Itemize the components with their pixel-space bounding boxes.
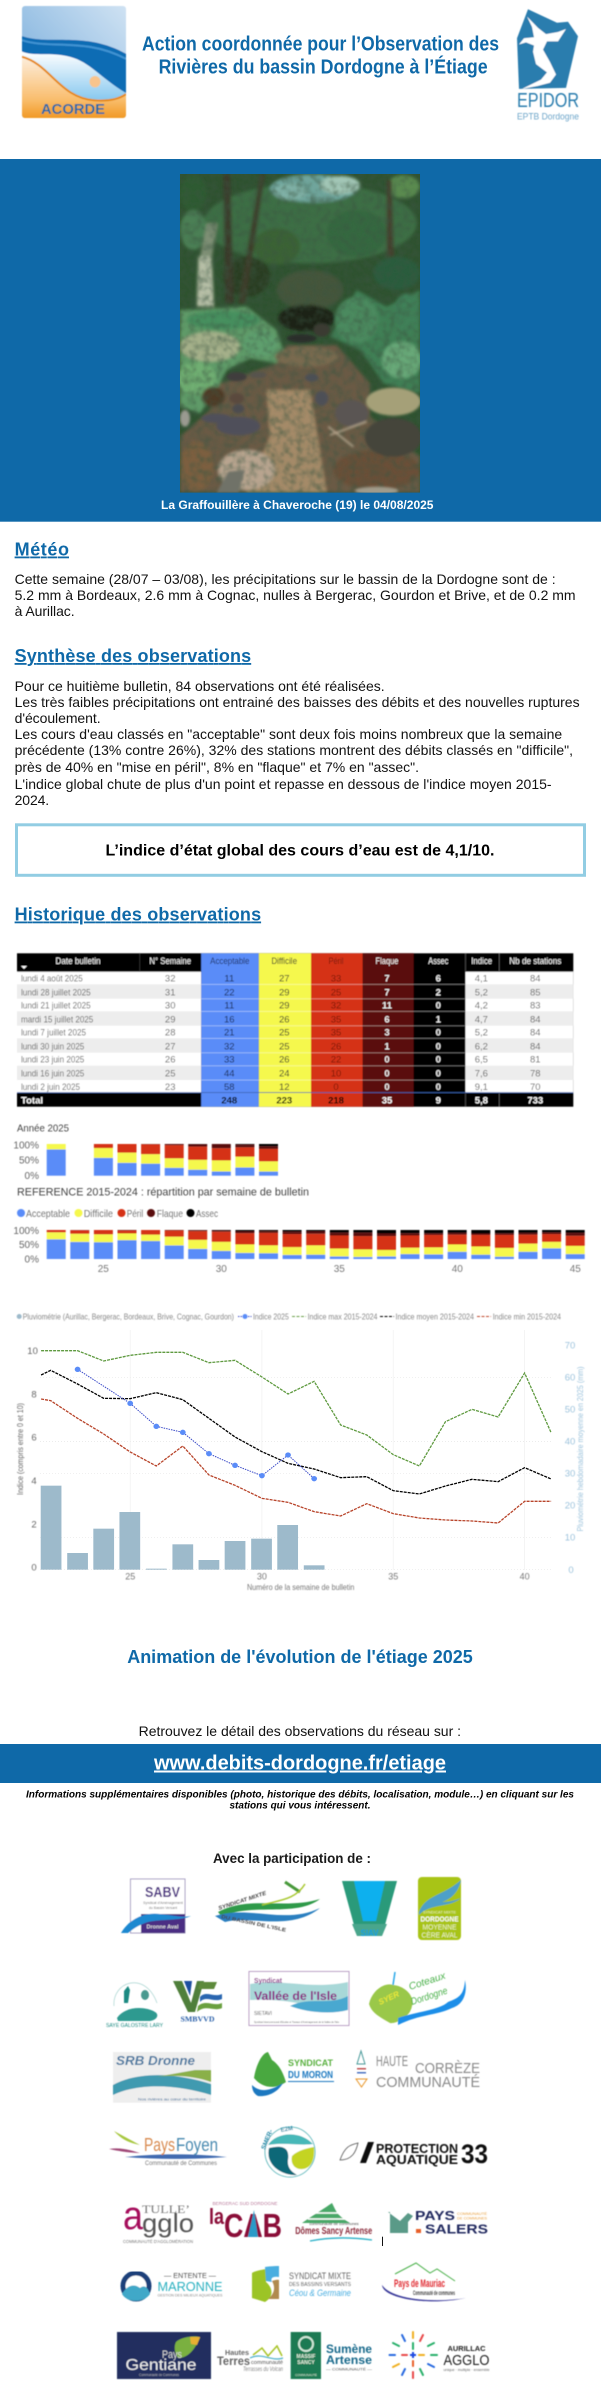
table: historique: 0	[436, 1082, 441, 1093]
legend: classes	[17, 1208, 218, 1220]
logo: SRB Dronne: Nos rivières au cœur du territoire	[138, 2096, 207, 2102]
heading: Historique des observations: Historique des observations	[15, 904, 261, 924]
table: historique: 0	[384, 1055, 390, 1066]
logo: Dordogne moyenne Cère aval: CÈRE AVAL	[422, 1930, 458, 1940]
logo: Pays Gentiane: Gentiane	[126, 2357, 197, 2374]
logo: Entente Maronne: — ENTENTE —	[164, 2273, 216, 2280]
logo: EPIDOR: EPTB Dordogne	[517, 112, 579, 122]
table: historique: mardi 15 juillet 2025	[21, 1014, 93, 1025]
legend: classes: Péril	[127, 1208, 143, 1220]
table: historique: 83	[530, 1000, 541, 1011]
table: historique: lundi 30 juin 2025	[21, 1041, 84, 1052]
table: historique: 44	[224, 1069, 235, 1080]
chart: stacked bars 2025: 100%	[13, 1140, 39, 1152]
logo: Hautes Terres: communauté	[251, 2360, 283, 2366]
logo: Massif du Sancy / Sumène Artense: COMMUNAUTÉ	[295, 2372, 317, 2377]
legend: line chart: Indice min 2015-2024	[493, 1312, 561, 1322]
table: historique: 11	[382, 1000, 393, 1011]
logo: La CAB: BERGERAC SUD DORDOGNE	[212, 2201, 278, 2206]
table: historique: 32	[224, 1041, 235, 1052]
text block: météo: 5.2 mm à Bordeaux, 2.6 mm à Cognac, nulles à Bergerac, Gourdon et Brive, et de 0.2 mm	[15, 587, 576, 603]
logo: SABV: Dronne Aval	[146, 1924, 179, 1930]
table: historique: 21	[224, 1028, 235, 1039]
table: historique: 9,1	[475, 1082, 488, 1093]
logo: Coteaux de Dordogne: Dordogne	[410, 1986, 449, 2008]
logo: Tulle agglo: TULLE’	[142, 2202, 190, 2216]
table: historique: 26	[279, 1055, 290, 1066]
logo: Vallée de l'Isle: Syndicat	[254, 1976, 282, 1985]
logo: SRB Dronne	[113, 2052, 211, 2103]
table: historique: 248	[221, 1096, 237, 1107]
rainfall bars	[41, 1486, 325, 1570]
table: historique: 5,2	[475, 1028, 488, 1039]
table: historique: lundi 4 août 2025	[21, 973, 83, 984]
table: historique: Total	[21, 1096, 43, 1107]
right axis: 10	[565, 1532, 575, 1544]
logo: Coteaux de Dordogne: SYER	[377, 1989, 401, 2007]
table: historique: 0	[436, 1069, 441, 1080]
table: historique: 1	[384, 1041, 390, 1052]
logo: SMER-E2M: E2M	[280, 2126, 294, 2134]
logo: Dordogne moyenne Cère aval	[418, 1877, 461, 1940]
logo: Massif du Sancy / Sumène Artense	[291, 2332, 372, 2379]
table: historique: 7	[384, 987, 390, 998]
logo: Haute-Corrèze Communauté: CORRÈZE	[415, 2060, 480, 2077]
text block: synthèse: 2024.	[15, 792, 49, 808]
table: historique: 81	[530, 1055, 541, 1066]
logo: Pays de Salers: SALERS	[425, 2222, 488, 2236]
table: historique: 23	[165, 1082, 175, 1093]
table: historique	[17, 953, 573, 1107]
logo: Syndicat du Moron: SYNDICAT	[288, 2058, 333, 2069]
logo: SABV: Syndicat d'Aménagement	[143, 1901, 183, 1905]
logo: Massif du Sancy / Sumène Artense: — COMMUNAUTÉ —	[326, 2366, 372, 2372]
chart: stacked bars reference 2015-2024	[13, 1226, 585, 1275]
logo: Céou et Germaine: DES BASSINS VERSANTS	[289, 2282, 351, 2288]
table: historique: 35	[331, 1014, 341, 1025]
table: historique: 31	[165, 987, 175, 998]
logo: SMBVVD: SMBVVD	[180, 2014, 215, 2024]
logo: Coteaux de Dordogne	[369, 1970, 466, 2025]
table: historique: 16	[224, 1014, 235, 1025]
table: historique: 218	[328, 1096, 344, 1107]
legend: line chart	[17, 1312, 561, 1322]
legend: classes: Acceptable	[26, 1208, 70, 1220]
table: historique: Indice	[471, 956, 492, 967]
logo: Protection aquatique 33	[340, 2139, 488, 2169]
chart: stacked bars reference 2015-2024: 25	[98, 1264, 109, 1275]
x axis: 35	[388, 1572, 398, 1582]
table: historique: 5,8	[475, 1096, 488, 1107]
left axis: Indice (compris entre 0 et 10)	[15, 1403, 25, 1495]
text block: météo: à Aurillac.	[15, 603, 75, 619]
right axis: 60	[565, 1372, 575, 1384]
table: historique: 22	[331, 1055, 341, 1066]
logo: La CAB: CAB	[224, 2207, 282, 2244]
text block: météo	[15, 571, 576, 619]
table: historique: lundi 16 juin 2025	[21, 1069, 84, 1080]
logo: Syndicat du Moron	[252, 2052, 334, 2096]
logo: ACORDE	[22, 6, 126, 118]
heading: participation: Avec la participation de :	[213, 1850, 371, 1866]
logo: Pays de Mauriac	[382, 2263, 466, 2301]
right axis: 20	[565, 1500, 575, 1512]
table: historique: 27	[165, 1041, 175, 1052]
table: historique: 25	[279, 1028, 290, 1039]
table: historique: Difficile	[271, 956, 297, 967]
table: historique: 6,2	[475, 1041, 488, 1052]
table: historique: lundi 21 juillet 2025	[21, 1000, 91, 1011]
right axis: 50	[565, 1404, 575, 1416]
logo: Massif du Sancy / Sumène Artense: SANCY	[297, 2360, 315, 2366]
text: informations supplémentaires: stations qui vous intéressent.	[230, 1800, 371, 1812]
table: historique: 29	[279, 1000, 290, 1011]
table: historique: 30	[165, 1000, 175, 1011]
title: Rivières du bassin Dordogne à l’Étiage	[159, 56, 488, 78]
link band: www.debits-dordogne.fr/etiage	[153, 1752, 446, 1774]
table: historique: 7,6	[475, 1069, 488, 1080]
chart: stacked bars reference 2015-2024: 35	[334, 1264, 345, 1275]
logo: Tulle agglo: COMMUNAUTÉ D'AGGLOMÉRATION	[123, 2238, 193, 2244]
table: historique: 84	[530, 1041, 541, 1052]
table: historique: 0	[436, 1000, 441, 1011]
table: historique: 84	[530, 1028, 541, 1039]
table: historique: 32	[165, 973, 175, 984]
photo: La Graffouillère	[177, 174, 422, 495]
table: historique: N° Semaine	[149, 956, 191, 967]
logo: SABV: du Bassin Versant	[149, 1906, 177, 1910]
callout: indice global: L’indice d’état global des cours d’eau est de 4,1/10.	[106, 842, 494, 860]
logo: SABV	[121, 1879, 191, 1933]
table: historique: lundi 2 juin 2025	[21, 1082, 80, 1093]
logo: Dordogne moyenne Cère aval: MOYENNE	[422, 1924, 457, 1932]
logo: EPIDOR: EPIDOR	[517, 90, 579, 112]
left axis: 2	[31, 1520, 37, 1530]
logo: Vallée de l'Isle	[249, 1972, 349, 2026]
table: historique: 84	[530, 973, 541, 984]
text block: synthèse: près de 40% en "mise en péril", 8% en "flaque" et 7% en "assec".	[15, 759, 419, 775]
logo: Dordogne moyenne Cère aval: SYNDICAT MIXTE	[423, 1910, 457, 1914]
table: historique: Acceptable	[210, 956, 249, 967]
logo: Vallée de l'Isle: Syndicat Intercommunal d'Etudes et Travaux d'Aménagement de la Vallée de l'Isle	[254, 2020, 339, 2024]
logo: Haute-Corrèze Communauté	[356, 2051, 480, 2091]
logo: La CAB: la	[209, 2204, 225, 2229]
table: historique: 9	[436, 1096, 441, 1107]
table: historique: 0	[384, 1069, 390, 1080]
logo: Saye Galostre Lary	[106, 1983, 163, 2029]
logo: Coteaux de Dordogne: Coteaux	[408, 1970, 448, 1993]
table: historique: Péril	[328, 956, 344, 967]
title: Action coordonnée pour l’Observation des	[142, 34, 499, 56]
table: historique: 223	[276, 1096, 292, 1107]
table: historique: 1	[436, 1014, 442, 1025]
logo: SMER-E2M: SMER-	[260, 2129, 275, 2151]
logo: Hautes Terres: Terres	[217, 2354, 250, 2368]
left axis: 0	[31, 1562, 37, 1574]
logo: Dômes Sancy Artense	[295, 2203, 373, 2241]
table: historique: 35	[382, 1096, 393, 1107]
logo: Aurillac Agglo: AURILLAC	[448, 2344, 486, 2353]
logo: Hautes Terres	[217, 2346, 283, 2373]
chart: stacked bars 2025	[13, 1140, 278, 1182]
table: historique: 0	[384, 1082, 390, 1093]
table: historique: 0	[436, 1041, 441, 1052]
logo: Pays de Salers: DE COMMUNES	[457, 2216, 488, 2220]
table: historique: 4,2	[475, 1000, 488, 1011]
table: historique: 26	[331, 1041, 341, 1052]
heading: REFERENCE 2015-2024: REFERENCE 2015-2024 : répartition par semaine de bulletin	[17, 1186, 309, 1198]
chart: stacked bars reference 2015-2024: 40	[452, 1264, 463, 1275]
table: historique: Nb de stations	[509, 956, 562, 967]
lines: index series	[41, 1351, 551, 1523]
table: historique: 24	[279, 1069, 290, 1080]
right axis: 70	[565, 1340, 575, 1352]
logo: Pays de Salers: PAYS	[415, 2208, 455, 2223]
heading: Synthèse des observations: Synthèse des observations	[15, 646, 251, 666]
legend: line chart: Indice moyen 2015-2024	[396, 1312, 474, 1322]
text: informations supplémentaires	[26, 1788, 574, 1812]
table: historique: 33	[331, 973, 341, 984]
table: historique: 70	[530, 1082, 541, 1093]
chart: stacked bars 2025: 0%	[25, 1171, 39, 1182]
text: retrouvez: Retrouvez le détail des observations du réseau sur :	[139, 1723, 461, 1739]
logo: Massif du Sancy / Sumène Artense: MASSIF	[297, 2354, 315, 2360]
table: historique: 84	[530, 1014, 541, 1025]
logo: Céou et Germaine: SYNDICAT MIXTE	[289, 2271, 351, 2281]
logo: Pays Gentiane	[117, 2332, 211, 2379]
logo: SABV: SABV	[145, 1884, 180, 1901]
left axis: 8	[31, 1390, 37, 1400]
table: historique: 0	[436, 1028, 441, 1039]
heading: animation: Animation de l'évolution de l'étiage 2025	[127, 1647, 473, 1667]
table: historique: 12	[279, 1082, 290, 1093]
table: historique: 25	[331, 987, 341, 998]
table: historique: Date bulletin	[56, 956, 100, 967]
x axis: 30	[257, 1572, 267, 1582]
table: historique: 10	[331, 1069, 341, 1080]
logo: Syndicat du Moron: DU MORON	[288, 2070, 333, 2081]
table: historique: lundi 7 juillet 2025	[21, 1028, 86, 1039]
logo: Dômes Sancy Artense: communauté de communes	[309, 2221, 359, 2226]
logo: Vallée de l'Isle: SIETAVI	[254, 2011, 272, 2017]
right axis: 30	[565, 1468, 575, 1480]
logo: SMER-E2M	[260, 2126, 315, 2177]
logo: Pays Foyen: Pays	[144, 2135, 175, 2155]
table: historique: 25	[165, 1069, 175, 1080]
left axis: 4	[31, 1476, 37, 1487]
chart: stacked bars reference 2015-2024: 45	[570, 1264, 581, 1275]
table: historique: 29	[279, 987, 290, 998]
text block: synthèse: d'écoulement.	[15, 710, 101, 726]
text block: synthèse: L'indice global chute de plus d'un point et repasse en dessous de l'indice moyen 2015-	[15, 776, 552, 792]
logo: Pays de Mauriac: Pays de Mauriac	[394, 2278, 445, 2290]
logo: Entente Maronne	[122, 2273, 223, 2301]
logo: Syndicat du bassin de l'Isle: DU BASSIN DE L'ISLE	[221, 1914, 287, 1934]
table: historique: 58	[224, 1082, 235, 1093]
table: historique: 0	[333, 1082, 339, 1093]
logo: EPIDOR	[517, 9, 579, 122]
logo: ACORDE: ACORDE	[41, 102, 105, 118]
right axis	[565, 1340, 585, 1576]
logo: Protection aquatique 33: 33	[461, 2139, 488, 2169]
logo: Dordogne moyenne Cère aval: DORDOGNE	[420, 1916, 459, 1924]
logo: SIAV	[342, 1881, 397, 1939]
text block: météo: Cette semaine (28/07 – 03/08), les précipitations sur le bassin de la Dordogne sont de :	[15, 571, 556, 587]
text block: synthèse: Pour ce huitième bulletin, 84 observations ont été réalisées.	[15, 678, 385, 694]
logo: Entente Maronne: MARONNE	[158, 2279, 223, 2294]
logo: Tulle agglo: gglo	[142, 2208, 194, 2238]
heading: Météo: Météo	[15, 540, 69, 560]
logo: Tulle agglo: a	[123, 2194, 144, 2238]
table: historique: 25	[279, 1041, 290, 1052]
table: historique: 11	[224, 973, 234, 984]
table: historique: 11	[224, 1000, 234, 1011]
logo: Pays Gentiane: Communauté de Communes	[139, 2372, 179, 2377]
logo: SRB Dronne: SRB Dronne	[116, 2053, 195, 2068]
table: historique: 4,7	[475, 1014, 488, 1025]
table: historique: 6,5	[475, 1055, 488, 1066]
text: informations supplémentaires: Informations supplémentaires disponibles (photo, historique des débits, localisation, module…) en cliquant sur les	[26, 1788, 574, 1800]
table: historique: 28	[165, 1028, 175, 1039]
title	[142, 34, 499, 78]
chart: stacked bars reference 2015-2024: 0%	[25, 1254, 39, 1266]
logo: Pays Foyen: Foyen	[176, 2135, 218, 2155]
x axis: 40	[520, 1572, 530, 1582]
logo: SMBVVD	[173, 1981, 222, 2024]
logo: Entente Maronne: GESTION DES MILIEUX AQUATIQUES	[158, 2294, 223, 2298]
legend: line chart: Indice 2025	[253, 1312, 289, 1322]
table: historique: 0	[436, 1055, 441, 1066]
logo: Pays de Salers: COMMUNAUTÉ	[457, 2211, 488, 2216]
left axis: 6	[31, 1432, 37, 1444]
logo: Saye Galostre Lary: SAYE GALOSTRE LARY	[106, 2023, 163, 2029]
text caret	[382, 2237, 383, 2246]
logo: Massif du Sancy / Sumène Artense: Artense	[326, 2355, 372, 2367]
logo: Syndicat du bassin de l'Isle: SYNDICAT MIXTE	[218, 1891, 268, 1912]
right axis: Pluviométrie hebdomadaire moyenne en 2025 (mm)	[575, 1366, 585, 1532]
table: historique: 2	[436, 987, 441, 998]
logo: SIAV: SIAV	[360, 1928, 379, 1939]
text block: synthèse: précédente (13% contre 26%), 32% des stations montrent des débits classés en "difficile",	[15, 742, 573, 758]
left axis: 10	[27, 1346, 38, 1357]
table: historique: 3	[384, 1028, 390, 1039]
chart: stacked bars reference 2015-2024: 50%	[19, 1240, 39, 1251]
logo: Aurillac Agglo: AGGLO	[444, 2352, 490, 2369]
logo: Céou et Germaine	[252, 2266, 351, 2302]
logo: Haute-Corrèze Communauté: HAUTE	[376, 2053, 408, 2070]
table: historique: lundi 28 juillet 2025	[21, 987, 91, 998]
chart: stacked bars reference 2015-2024: 30	[216, 1264, 227, 1275]
chart: stacked bars reference 2015-2024: 100%	[13, 1226, 39, 1237]
logo: Aurillac Agglo: unique · multiple · ensemble	[444, 2368, 490, 2372]
text block: synthèse	[15, 678, 580, 808]
chart: indice and rainfall	[15, 1330, 585, 1592]
logo: Protection aquatique 33: PROTECTION	[376, 2142, 458, 2156]
legend: classes: Assec	[196, 1208, 218, 1220]
legend: line chart: Pluviométrie (Aurillac, Bergerac, Bordeaux, Brive, Cognac, Gourdon)	[23, 1312, 234, 1322]
logo: Dômes Sancy Artense: Dômes Sancy Artense	[295, 2226, 373, 2237]
logo: Pays Foyen	[109, 2131, 227, 2167]
right axis: 40	[565, 1436, 575, 1448]
link band	[0, 1744, 601, 1783]
logo: La CAB	[209, 2201, 282, 2244]
logo: Vallée de l'Isle: Vallée de l'Isle	[254, 1989, 337, 2003]
logo: Massif du Sancy / Sumène Artense: Sumène	[326, 2344, 372, 2356]
logo: Pays de Salers	[388, 2208, 488, 2236]
logo: Tulle agglo	[123, 2194, 194, 2244]
table: historique: 27	[279, 973, 290, 984]
right axis: 0	[568, 1565, 574, 1576]
table: historique: 26	[279, 1014, 290, 1025]
x axis: 25	[125, 1572, 135, 1582]
table: historique: 733	[527, 1096, 543, 1107]
table: historique: 6	[384, 1014, 390, 1025]
logo: Pays de Mauriac: Communauté de communes	[413, 2291, 455, 2297]
photo caption: La Graffouillère à Chaveroche (19) le 04/08/2025	[161, 498, 434, 512]
legend: classes: Flaque	[157, 1208, 183, 1220]
table: historique: Flaque	[376, 956, 398, 967]
x axis: Numéro de la semaine de bulletin	[247, 1582, 355, 1592]
table: historique: 35	[331, 1028, 341, 1039]
logo: Pays Gentiane: Pays	[162, 2349, 182, 2361]
logo: Pays Foyen: Communauté de Communes	[145, 2160, 218, 2167]
callout: indice global	[16, 825, 584, 875]
table: historique: 26	[165, 1055, 175, 1066]
logo: Haute-Corrèze Communauté: COMMUNAUTÉ	[376, 2074, 480, 2091]
logo: Hautes Terres: Hautes	[225, 2350, 249, 2357]
text block: synthèse: Les cours d'eau classés en "acceptable" sont deux fois moins nombreux que la semaine	[15, 726, 562, 742]
legend: classes: Difficile	[84, 1208, 113, 1220]
table: historique: lundi 23 juin 2025	[21, 1055, 84, 1066]
logo: Aurillac Agglo	[390, 2332, 490, 2378]
table: historique: 29	[165, 1014, 175, 1025]
table: historique: 32	[331, 1000, 341, 1011]
photo band	[0, 159, 601, 522]
table: historique: 85	[530, 987, 541, 998]
table: historique: 7	[384, 973, 390, 984]
table: historique: 6	[436, 973, 441, 984]
table: historique: Assec	[428, 956, 448, 967]
logo: Syndicat du bassin de l'Isle	[215, 1882, 320, 1934]
text block: synthèse: Les très faibles précipitations ont entrainé des baisses des débits et des nouvelles ruptures	[15, 694, 580, 710]
logo: Céou et Germaine: Céou & Germaine	[289, 2288, 351, 2298]
table: historique: 78	[530, 1069, 541, 1080]
table: historique: 5,2	[475, 987, 488, 998]
table: historique: 4,1	[475, 973, 488, 984]
left axis	[15, 1346, 38, 1574]
logo: Hautes Terres: Terrasses du Volcan	[243, 2367, 283, 2373]
chart: stacked bars 2025: 50%	[19, 1156, 39, 1166]
legend: line chart: Indice max 2015-2024	[308, 1312, 378, 1322]
table: historique: 22	[224, 987, 235, 998]
heading: Année 2025: Année 2025	[17, 1122, 69, 1134]
logo: Protection aquatique 33: AQUATIQUE	[376, 2153, 458, 2167]
table: historique: 33	[224, 1055, 235, 1066]
x axis	[125, 1572, 530, 1592]
